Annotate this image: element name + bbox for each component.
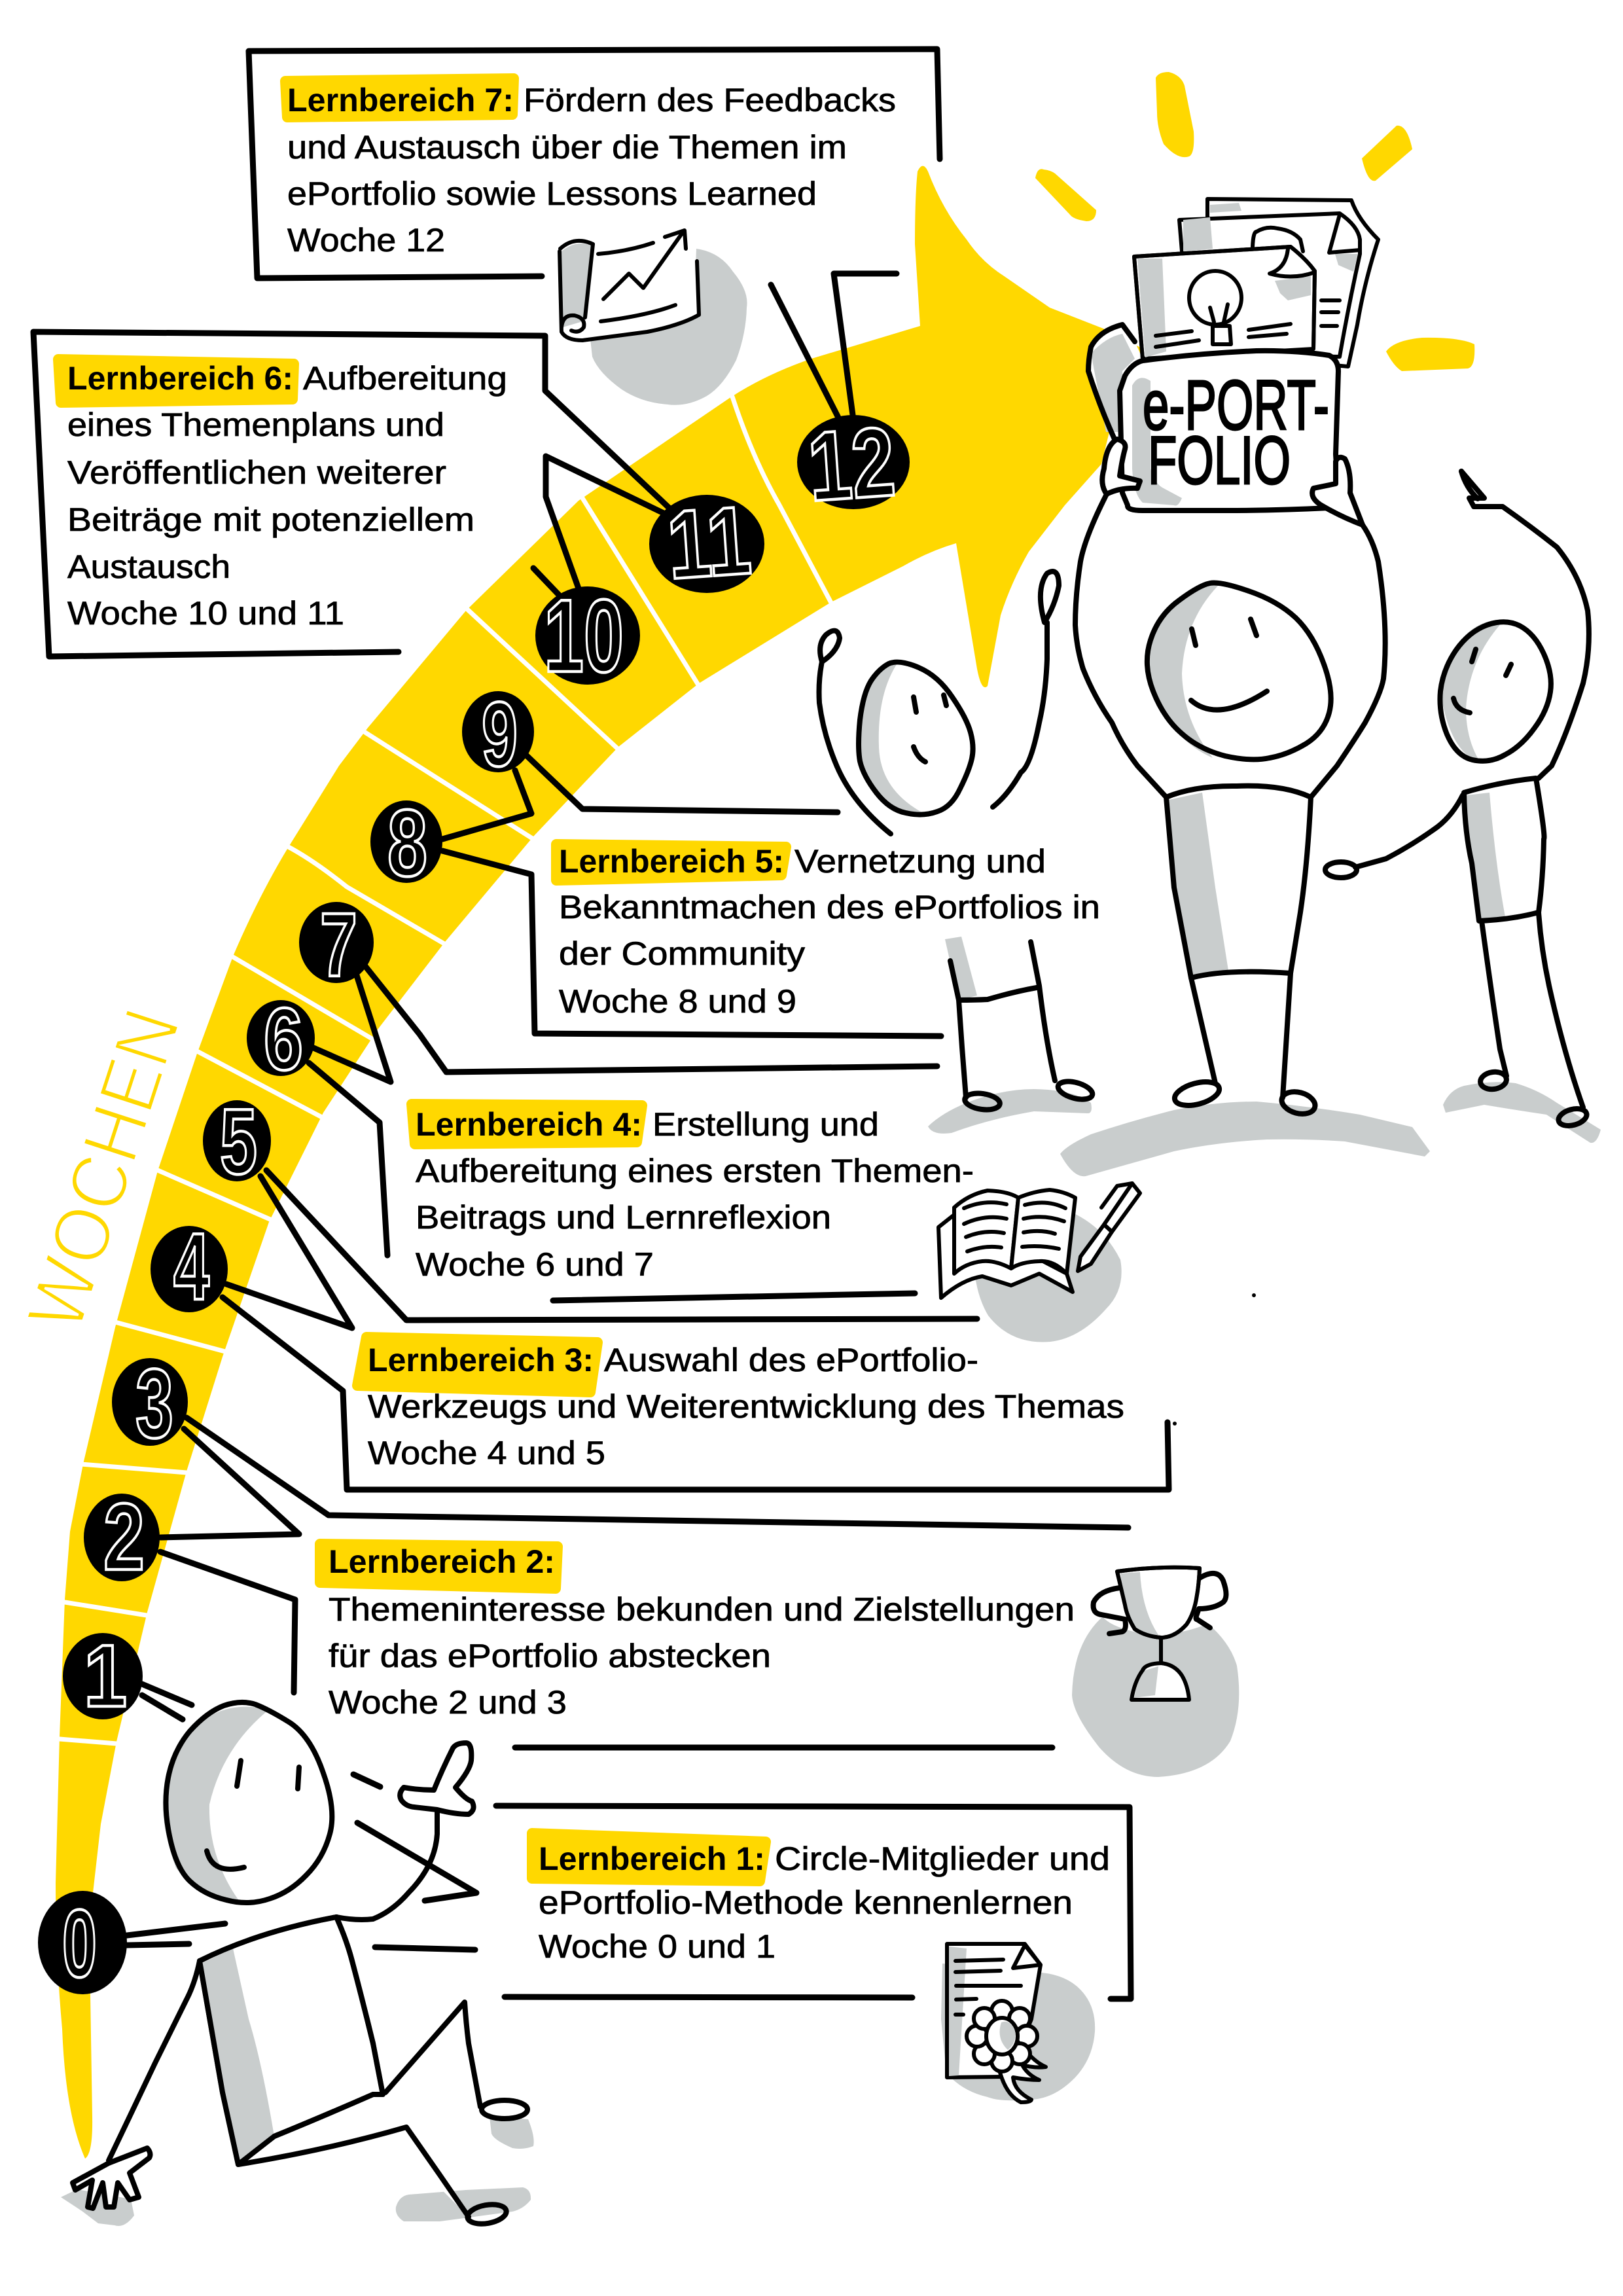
head bbox=[1147, 583, 1331, 759]
week 11: 11 bbox=[664, 486, 755, 600]
back thumb bbox=[1088, 325, 1143, 439]
figure: big person holding ePortfolio bbox=[1075, 494, 1385, 1117]
week 3: 3 bbox=[135, 1348, 173, 1458]
panel: Lernbereich 3: Woche 4 und 5 bbox=[368, 1435, 605, 1471]
panel: Lernbereich 5 bbox=[556, 843, 1100, 1020]
panel: Lernbereich 7: und Austausch über die Themen im bbox=[287, 129, 847, 166]
week 5: 5 bbox=[220, 1090, 257, 1194]
week 0: 0 bbox=[62, 1890, 97, 1998]
text: Lernbereich 4: bbox=[416, 1106, 642, 1143]
panel: Lernbereich 7: Woche 12 bbox=[287, 222, 445, 259]
face bbox=[914, 695, 946, 762]
text: Lernbereich 2: bbox=[329, 1543, 555, 1580]
arms bbox=[819, 631, 891, 834]
legs and feet bbox=[1482, 912, 1583, 1107]
highlight bbox=[357, 1337, 597, 1392]
head bbox=[859, 662, 973, 815]
panel: Lernbereich 5: Woche 8 und 9 bbox=[559, 983, 796, 1020]
lightbulb bbox=[1189, 271, 1241, 325]
panel: Lernbereich 4 bbox=[412, 1104, 974, 1300]
underline bbox=[553, 1293, 915, 1300]
connector lines from week numbers bbox=[127, 274, 1169, 1950]
face bbox=[1454, 649, 1511, 713]
text: Lernbereich 5: bbox=[559, 843, 784, 880]
panel: Lernbereich 3 bbox=[357, 1337, 1124, 1471]
text: Lernbereich 3: bbox=[368, 1342, 594, 1378]
week 12: 12 bbox=[804, 406, 899, 522]
highlight bbox=[320, 1544, 558, 1588]
panel: Lernbereich 6: Aufbereitung bbox=[303, 360, 507, 397]
sun rays bbox=[1035, 72, 1474, 371]
week 4: 4 bbox=[173, 1213, 209, 1319]
face bbox=[207, 1761, 299, 1869]
body with arms bbox=[1075, 494, 1385, 797]
panel: Lernbereich 2: für das ePortfolio abstecken bbox=[329, 1638, 771, 1674]
panel: Lernbereich 6: Veröffentlichen weiterer bbox=[67, 454, 446, 491]
week 1: 1 bbox=[84, 1626, 127, 1725]
panel: Lernbereich 5: Bekanntmachen des ePortfolios in bbox=[559, 889, 1100, 925]
week 10: 10 bbox=[544, 579, 624, 694]
panel: Lernbereich 1 bbox=[496, 1806, 1131, 1999]
head bbox=[166, 1702, 332, 1903]
binder bbox=[1120, 351, 1338, 511]
week 7 bbox=[299, 895, 374, 996]
figure: seated person pointing bbox=[73, 1702, 527, 2227]
frame bbox=[249, 49, 940, 278]
face bbox=[1191, 619, 1267, 710]
panel: Lernbereich 6: Beiträge mit potenziellem bbox=[67, 501, 474, 538]
legs and feet bbox=[385, 2002, 480, 2107]
week 1 bbox=[63, 1626, 143, 1725]
underline bbox=[515, 1745, 1052, 1750]
shirt bbox=[1169, 793, 1228, 978]
week 3 bbox=[112, 1348, 188, 1458]
panel: Lernbereich 7 bbox=[249, 49, 940, 278]
week 2: 2 bbox=[103, 1484, 145, 1590]
highlight bbox=[58, 359, 294, 403]
panel: Lernbereich 1: Circle-Mitglieder und bbox=[775, 1840, 1110, 1877]
head bbox=[1440, 622, 1551, 761]
ribbon week dividers bbox=[60, 397, 831, 1744]
torso bbox=[200, 1917, 383, 2164]
week 0 bbox=[38, 1890, 127, 1998]
legs and feet bbox=[1191, 973, 1291, 1098]
panel: Lernbereich 4: Erstellung und bbox=[652, 1106, 879, 1143]
frame bbox=[496, 1806, 1131, 1999]
arrow ribbon: weeks path bbox=[56, 166, 1152, 2159]
week markers bbox=[38, 406, 910, 1998]
raised arm and hand bbox=[336, 1810, 437, 1920]
panel: Lernbereich 4: Beitrags und Lernreflexion bbox=[416, 1199, 831, 1236]
panel: Lernbereich 1: Woche 0 und 1 bbox=[539, 1928, 776, 1965]
front sheet bbox=[1134, 247, 1315, 359]
highlight bbox=[556, 844, 786, 880]
icon: ePortfolio binder with documents: FOLIO bbox=[1148, 423, 1291, 499]
hands bbox=[1102, 439, 1140, 494]
week 4 bbox=[151, 1213, 228, 1319]
panel: Lernbereich 4: Aufbereitung eines ersten Themen- bbox=[416, 1153, 974, 1189]
highlight bbox=[532, 1833, 766, 1881]
panel: Lernbereich 6: Austausch bbox=[67, 548, 230, 585]
panel: Lernbereich 6: Woche 10 und 11 bbox=[67, 595, 344, 632]
highlight bbox=[412, 1104, 642, 1144]
panel: Lernbereich 3: Werkzeugs und Weiterentwicklung des Themas bbox=[368, 1388, 1124, 1425]
label: WOCHEN: WOCHEN bbox=[10, 999, 197, 1340]
text: Lernbereich 6: bbox=[67, 360, 293, 397]
panel: Lernbereich 1: ePortfolio-Methode kennenlernen bbox=[539, 1884, 1073, 1921]
panel: Lernbereich 6: eines Themenplans und bbox=[67, 406, 444, 443]
legs bbox=[945, 937, 977, 1000]
stray dots bbox=[1173, 1293, 1256, 1426]
week 6: 6 bbox=[264, 990, 303, 1088]
binder label: e-PORT- bbox=[1143, 365, 1329, 444]
figure: small cheering person bbox=[819, 571, 1094, 1112]
middle sheet bbox=[1179, 213, 1360, 357]
icon: scroll with rising chart bbox=[560, 230, 747, 405]
week 8: 8 bbox=[387, 790, 427, 896]
shirt bbox=[1467, 793, 1505, 920]
left arm and hand bbox=[109, 1961, 200, 2161]
pointing arm bbox=[1355, 795, 1463, 867]
panel: Lernbereich 7: ePortfolio sowie Lessons Learned bbox=[287, 175, 817, 212]
week 7: 7 bbox=[320, 895, 357, 996]
week 2 bbox=[84, 1484, 160, 1590]
frame bbox=[33, 332, 675, 656]
icon: trophy bbox=[1072, 1568, 1239, 1777]
panel: Lernbereich 2: Themeninteresse bekunden und Zielstellungen bbox=[329, 1591, 1075, 1628]
icon: ePortfolio binder with documents bbox=[1088, 199, 1378, 525]
panel: Lernbereich 2: Woche 2 und 3 bbox=[329, 1684, 567, 1721]
panel: Lernbereich 3: Auswahl des ePortfolio- bbox=[604, 1342, 978, 1378]
ground shadows bbox=[61, 1082, 1601, 2226]
panel: Lernbereich 2 bbox=[320, 1543, 1075, 1748]
panel: Lernbereich 6 bbox=[33, 332, 675, 656]
panel: Lernbereich 7: Fördern des Feedbacks bbox=[524, 82, 896, 118]
panel: Lernbereich 5: Vernetzung und bbox=[794, 843, 1046, 880]
icon: open book with pen bbox=[938, 1183, 1140, 1342]
text: Lernbereich 7: bbox=[287, 82, 514, 118]
back sheet bbox=[1207, 199, 1378, 367]
figure: person on the right bbox=[1325, 471, 1589, 1128]
icon: certificate with rosette bbox=[941, 1944, 1095, 2102]
week 9: 9 bbox=[482, 683, 518, 785]
panel: Lernbereich 4: Woche 6 und 7 bbox=[416, 1246, 654, 1283]
panel: Lernbereich 5: der Community bbox=[559, 935, 805, 972]
text: Lernbereich 1: bbox=[539, 1840, 765, 1877]
raised arm bbox=[1461, 471, 1589, 778]
highlight bbox=[285, 79, 514, 117]
